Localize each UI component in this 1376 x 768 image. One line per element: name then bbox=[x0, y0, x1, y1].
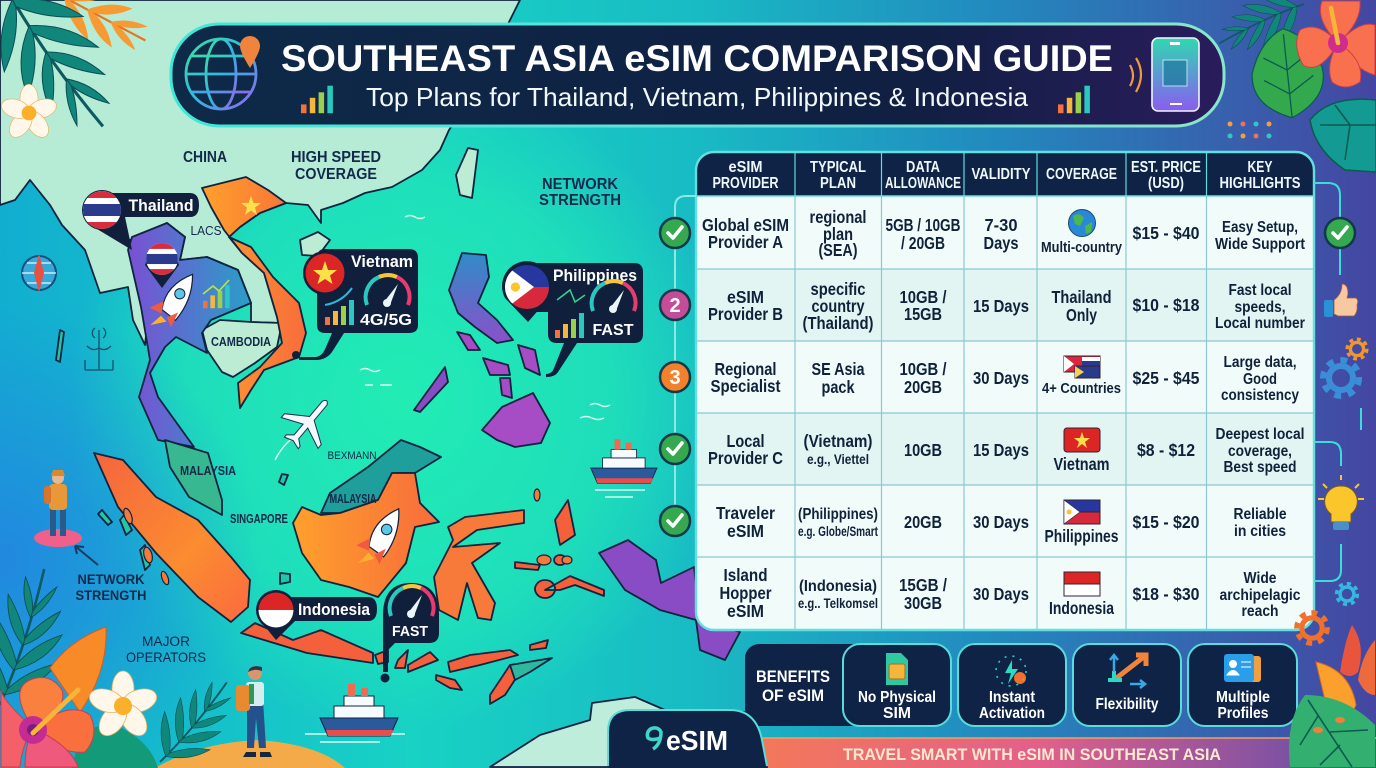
callout: Indonesia speed gauge: FAST bbox=[392, 624, 428, 640]
row: Global eSIM Provider A: Global eSIM bbox=[702, 215, 789, 235]
row: Global eSIM Provider A bbox=[702, 207, 1306, 260]
benefit card: Instant Activation: Instant bbox=[989, 689, 1036, 706]
benefits strip bbox=[745, 644, 1297, 726]
icon: small blue gear bbox=[1337, 584, 1357, 604]
icon: gears bbox=[1323, 339, 1367, 396]
row: eSIM Provider B: Thailand bbox=[1052, 287, 1112, 307]
green monstera leaf bbox=[1289, 695, 1375, 767]
icon: ship right bbox=[591, 439, 657, 483]
icon: rocket over Thailand bbox=[145, 265, 196, 334]
small islands bbox=[122, 489, 572, 586]
Malaysian Borneo bbox=[321, 440, 441, 513]
map label: Network Strength left: STRENGTH bbox=[76, 587, 146, 603]
row: Regional Specialist: $25 - $45 bbox=[1132, 368, 1200, 388]
row: Island Hopper eSIM: 30 Days bbox=[973, 584, 1029, 604]
row: Local Provider C: $8 - $12 bbox=[1137, 440, 1195, 460]
Java and Lesser Sunda islands bbox=[241, 623, 548, 704]
benefits heading: BENEFITS bbox=[756, 668, 830, 686]
row: Global eSIM Provider A: Days bbox=[984, 233, 1019, 253]
benefits heading bbox=[756, 668, 830, 705]
icon: Vietnam flag bbox=[1064, 428, 1100, 452]
map label: Cambodia: CAMBODIA bbox=[211, 334, 272, 349]
callout: Philippines: Philippines bbox=[553, 267, 637, 285]
Peninsular Malaysia bbox=[165, 440, 222, 515]
row: Local Provider C: Best speed bbox=[1224, 459, 1296, 476]
icon: light bulb bbox=[1318, 475, 1364, 530]
person: backpacker on sand bbox=[236, 666, 272, 757]
benefit card: No Physical SIM bbox=[843, 644, 951, 726]
row: Traveler eSIM: in cities bbox=[1234, 523, 1286, 540]
row: Traveler eSIM: (Philippines) bbox=[798, 506, 878, 523]
row: Traveler eSIM: eSIM bbox=[727, 521, 764, 541]
row: Local Provider C: 15 Days bbox=[973, 440, 1029, 460]
callout: Vietnam bbox=[292, 249, 418, 360]
row: Global eSIM Provider A: / 20GB bbox=[901, 233, 945, 253]
arrow to left traveller bbox=[75, 546, 98, 565]
table header row: VALIDITY bbox=[972, 166, 1031, 183]
row: Island Hopper eSIM: Hopper bbox=[720, 583, 772, 603]
row: Local Provider C: 10GB bbox=[904, 440, 942, 460]
Hainan and Taiwan bbox=[300, 148, 478, 256]
map label: Major Operators: OPERATORS bbox=[126, 649, 206, 665]
Sulawesi bbox=[434, 510, 524, 620]
table header row: EST. PRICE bbox=[1131, 159, 1201, 176]
teal monstera leaf bbox=[1310, 99, 1376, 172]
callout: Thailand bbox=[82, 190, 199, 250]
icon: earth globe bbox=[1068, 210, 1096, 236]
Vietnam flag bbox=[306, 254, 344, 292]
table header row: DATA bbox=[906, 159, 940, 176]
icon: compass globe bbox=[22, 254, 56, 292]
row: Traveler eSIM: Traveler bbox=[716, 503, 775, 523]
benefit card: Multiple Profiles: Profiles bbox=[1218, 705, 1269, 722]
rank badge 2: 2 bbox=[669, 295, 681, 317]
benefit card: Multiple Profiles bbox=[1188, 644, 1297, 726]
icon: phone with SIM bbox=[1152, 38, 1199, 111]
right connector rail bbox=[1314, 183, 1361, 581]
row: Global eSIM Provider A: (SEA) bbox=[818, 240, 858, 260]
Thailand flag bbox=[83, 191, 121, 229]
icon: ship bottom bbox=[320, 684, 398, 736]
Timor bbox=[510, 658, 552, 680]
left rank rail bbox=[660, 196, 696, 536]
row: Island Hopper eSIM: eSIM bbox=[727, 601, 764, 621]
row: Local Provider C: (Vietnam) bbox=[804, 431, 872, 451]
orange leaf bbox=[50, 627, 106, 712]
benefits heading: OF eSIM bbox=[762, 687, 824, 705]
map label: Network Strength top: STRENGTH bbox=[539, 192, 621, 209]
row: Island Hopper eSIM: 30GB bbox=[904, 593, 942, 613]
green leaf bbox=[72, 725, 158, 768]
eSIM logo tab: eSIM bbox=[666, 725, 728, 756]
map label: High Speed Coverage: COVERAGE bbox=[295, 166, 377, 183]
icon: plumeria top left bbox=[0, 84, 59, 142]
callout: Vietnam: Vietnam bbox=[351, 253, 413, 271]
row: Island Hopper eSIM: Island bbox=[724, 565, 768, 585]
map label: Malaysia peninsula: MALAYSIA bbox=[180, 463, 237, 478]
foliage: top right bbox=[1208, 0, 1376, 172]
table header row: HIGHLIGHTS bbox=[1220, 175, 1301, 192]
row: Regional Specialist: 30 Days bbox=[973, 368, 1029, 388]
rank check 5 bbox=[660, 506, 690, 536]
Mindanao bbox=[482, 393, 550, 447]
Luzon bbox=[449, 253, 513, 343]
callout: Indonesia: Indonesia bbox=[298, 601, 371, 619]
icon: thumbs up bbox=[1324, 284, 1358, 317]
small western islands bbox=[56, 330, 290, 584]
row: eSIM Provider B: country bbox=[812, 296, 865, 316]
row: Traveler eSIM: $15 - $20 bbox=[1132, 512, 1200, 532]
icon: wireless waves bbox=[1130, 58, 1141, 92]
row: Traveler eSIM: Reliable bbox=[1234, 506, 1287, 523]
row: Island Hopper eSIM: (Indonesia) bbox=[799, 578, 877, 595]
row: Regional Specialist: Large data, bbox=[1224, 354, 1296, 371]
title banner bbox=[171, 24, 1224, 126]
row: Island Hopper eSIM: reach bbox=[1242, 603, 1278, 620]
sand island bbox=[155, 740, 345, 768]
row: eSIM Provider B: Provider B bbox=[708, 304, 783, 324]
comparison table bbox=[696, 152, 1314, 630]
table header row: COVERAGE bbox=[1046, 166, 1117, 183]
icon: hibiscus bottom left bbox=[1, 678, 94, 767]
row: Traveler eSIM: 30 Days bbox=[973, 512, 1029, 532]
benefit card: Flexibility bbox=[1073, 644, 1181, 726]
icon: stacked flags bbox=[1064, 356, 1100, 378]
row: eSIM Provider B: Fast local bbox=[1228, 282, 1292, 299]
table header row: PLAN bbox=[820, 175, 856, 192]
map label: Malaysia Borneo: MALAYSIA bbox=[330, 492, 376, 506]
Papua bbox=[599, 540, 740, 660]
map label: High Speed Coverage bbox=[291, 149, 381, 183]
row: Local Provider C: Local bbox=[726, 431, 764, 451]
row: Island Hopper eSIM: archipelagic bbox=[1220, 587, 1301, 604]
row: Island Hopper eSIM: Wide bbox=[1244, 570, 1277, 587]
row: Traveler eSIM: e.g. Globe/Smart bbox=[798, 524, 878, 539]
map label: Network Strength left: NETWORK bbox=[78, 571, 144, 587]
foliage: top left bbox=[0, 0, 158, 155]
Palawan bbox=[414, 367, 448, 412]
person: left traveller bbox=[34, 470, 82, 547]
icon: Indonesia flag bbox=[1064, 572, 1100, 596]
row: Global eSIM Provider A: plan bbox=[823, 224, 853, 244]
row: Regional Specialist: 20GB bbox=[904, 377, 942, 397]
row: Regional Specialist: SE Asia bbox=[812, 359, 865, 379]
callout: Vietnam: 4G/5G bbox=[360, 312, 412, 329]
Cambodia bbox=[202, 320, 282, 377]
landmass: China, Myanmar, Laos bbox=[0, 0, 520, 345]
row: Local Provider C: e.g., Viettel bbox=[807, 452, 869, 467]
row: Global eSIM Provider A: Multi-country bbox=[1041, 240, 1122, 256]
Thailand map pin bbox=[145, 243, 179, 288]
row: Global eSIM Provider A: regional bbox=[810, 207, 866, 227]
row: Global eSIM Provider A: Wide Support bbox=[1215, 236, 1306, 253]
row: Regional Specialist: consistency bbox=[1221, 387, 1299, 404]
icon: signal bars left bbox=[301, 86, 333, 113]
footer banner: TRAVEL SMART WITH eSIM IN SOUTHEAST ASIA bbox=[843, 745, 1221, 764]
icon: hibiscus top right bbox=[1297, 1, 1375, 87]
row: eSIM Provider B: 15 Days bbox=[973, 296, 1029, 316]
eSIM logo tab bbox=[608, 710, 768, 768]
table header row: TYPICAL bbox=[810, 159, 866, 176]
icon: orange gear bbox=[1297, 613, 1327, 643]
icon: location pin bbox=[240, 36, 260, 68]
benefit card: No Physical SIM: No Physical bbox=[858, 689, 936, 706]
map label: Network Strength left bbox=[76, 571, 146, 603]
rank check 4 bbox=[660, 434, 690, 464]
row: eSIM Provider B: eSIM bbox=[727, 287, 764, 307]
row: Island Hopper eSIM: $18 - $30 bbox=[1132, 584, 1200, 604]
row: Island Hopper eSIM: e.g.. Telkomsel bbox=[798, 596, 878, 611]
title text: SOUTHEAST ASIA eSIM COMPARISON GUIDE bbox=[281, 38, 1113, 79]
row: eSIM Provider B: $10 - $18 bbox=[1132, 295, 1200, 315]
map label: High Speed Coverage: HIGH SPEED bbox=[291, 149, 381, 166]
icon: Philippines flag bbox=[1064, 500, 1100, 524]
row: Regional Specialist: Regional bbox=[714, 359, 776, 379]
row: Regional Specialist: Specialist bbox=[710, 376, 781, 396]
benefit card: Multiple Profiles: Multiple bbox=[1216, 689, 1270, 706]
rank badge 2 bbox=[660, 290, 690, 320]
row: Regional Specialist: pack bbox=[822, 377, 855, 397]
subtitle text: Top Plans for Thailand, Vietnam, Philippines & Indonesia bbox=[366, 82, 1029, 112]
row: Global eSIM Provider A: $15 - $40 bbox=[1132, 223, 1200, 243]
foliage: bottom left bbox=[0, 557, 345, 768]
icon: Vietnam star on map bbox=[241, 196, 261, 215]
Philippines flag bbox=[505, 265, 549, 309]
map label: Singapore: SINGAPORE bbox=[230, 511, 288, 526]
map of Southeast Asia bbox=[0, 0, 766, 767]
row: Regional Specialist: 4+ Countries bbox=[1042, 381, 1121, 397]
mini chart over Thailand bbox=[203, 280, 230, 308]
map label: Network Strength top bbox=[539, 176, 621, 209]
rank badge 3: 3 bbox=[669, 367, 681, 389]
row: Island Hopper eSIM bbox=[720, 565, 1301, 621]
icon: plumeria bottom left bbox=[86, 671, 160, 741]
icon: network tower bbox=[85, 328, 113, 370]
row: Traveler eSIM: 20GB bbox=[904, 512, 942, 532]
callout: Philippines bbox=[502, 261, 643, 377]
Maluku islands bbox=[515, 500, 604, 598]
callout: Indonesia speed gauge bbox=[380, 583, 439, 682]
row: Traveler eSIM bbox=[716, 500, 1287, 546]
map label: China: CHINA bbox=[183, 149, 227, 166]
footer banner bbox=[760, 738, 1376, 768]
Sumatra bbox=[94, 453, 250, 622]
callout: Philippines: FAST bbox=[592, 322, 634, 339]
icon: globe with pin bbox=[186, 39, 256, 109]
icon: signal bars right bbox=[1058, 86, 1090, 113]
row: eSIM Provider B: Local number bbox=[1215, 315, 1305, 332]
row: eSIM Provider B: specific bbox=[810, 279, 866, 299]
benefit card: Flexibility: Flexibility bbox=[1096, 696, 1159, 713]
Visayas bbox=[457, 332, 540, 398]
Australia coast bbox=[490, 697, 766, 767]
table header row: eSIM bbox=[728, 159, 762, 176]
map label: Laos: LACS bbox=[190, 223, 222, 238]
row: Global eSIM Provider A: Easy Setup, bbox=[1222, 219, 1298, 236]
Indonesia flag bbox=[259, 593, 293, 627]
benefit card: Instant Activation: Activation bbox=[979, 705, 1045, 722]
row: Regional Specialist: 10GB / bbox=[900, 359, 947, 379]
map label: Major Operators bbox=[126, 633, 206, 665]
row: Traveler eSIM: Philippines bbox=[1044, 526, 1119, 546]
table header row: (USD) bbox=[1148, 175, 1184, 192]
right rail check bbox=[1325, 218, 1355, 248]
callout: Thailand: Thailand bbox=[128, 197, 194, 215]
rank badge 3 bbox=[660, 362, 690, 392]
table header row bbox=[712, 159, 1301, 192]
row: Local Provider C: Deepest local bbox=[1216, 426, 1304, 443]
Vietnam bbox=[202, 177, 306, 408]
decorative dots bbox=[1228, 122, 1272, 138]
row: Local Provider C bbox=[708, 426, 1304, 476]
foliage: bottom right bbox=[1289, 625, 1375, 767]
row: Local Provider C: Provider C bbox=[708, 448, 783, 468]
icon: airplane bbox=[273, 385, 345, 458]
Kalimantan bbox=[293, 473, 439, 597]
callout: Indonesia bbox=[256, 590, 377, 640]
row: Global eSIM Provider A: 7-30 bbox=[984, 215, 1018, 235]
table header row: PROVIDER bbox=[712, 175, 779, 192]
row: Local Provider C: coverage, bbox=[1228, 443, 1292, 460]
sea waves bbox=[275, 216, 645, 742]
icon: eSIM logo mark bbox=[647, 728, 661, 749]
row: Global eSIM Provider A: Provider A bbox=[708, 232, 783, 252]
row: eSIM Provider B: Only bbox=[1066, 305, 1097, 325]
icon: rocket over Borneo bbox=[352, 501, 402, 571]
row: eSIM Provider B bbox=[708, 279, 1305, 333]
benefit card: No Physical SIM: SIM bbox=[883, 705, 911, 722]
row: eSIM Provider B: 15GB bbox=[904, 304, 942, 324]
row: Island Hopper eSIM: 15GB / bbox=[899, 575, 947, 595]
row: Global eSIM Provider A: 5GB / 10GB bbox=[886, 215, 960, 235]
row: Regional Specialist bbox=[710, 354, 1299, 404]
row: Local Provider C: Vietnam bbox=[1054, 454, 1110, 474]
map label: Bexmann: BEXMANN bbox=[328, 450, 377, 462]
Thailand bbox=[128, 223, 251, 447]
row: Island Hopper eSIM: Indonesia bbox=[1049, 598, 1114, 618]
row: Regional Specialist: Good bbox=[1243, 371, 1277, 388]
row: eSIM Provider B: speeds, bbox=[1234, 299, 1286, 316]
map label: Network Strength top: NETWORK bbox=[542, 176, 618, 193]
row: eSIM Provider B: (Thailand) bbox=[802, 313, 874, 333]
map label: Major Operators: MAJOR bbox=[142, 633, 190, 649]
benefit card: Instant Activation bbox=[958, 644, 1066, 726]
table header row: ALLOWANCE bbox=[885, 175, 961, 192]
row: eSIM Provider B: 10GB / bbox=[900, 287, 947, 307]
table header row: KEY bbox=[1248, 159, 1273, 176]
rank check 1 bbox=[660, 218, 690, 248]
